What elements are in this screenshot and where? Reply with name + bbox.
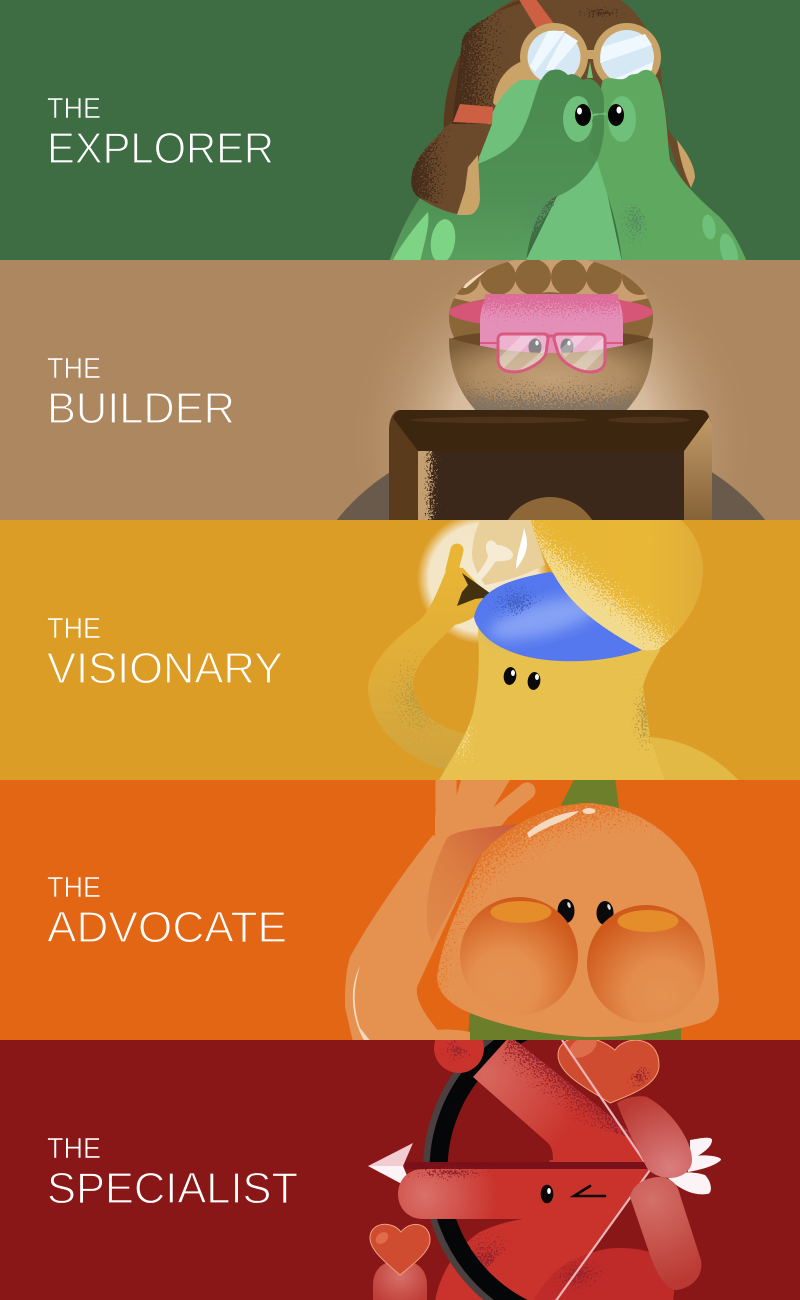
bowl interior: [449, 333, 653, 346]
light bulb with glow: [417, 512, 549, 644]
upper arm: [473, 1036, 650, 1165]
icon: lower heart: [370, 1224, 430, 1275]
left cheek orb: [460, 897, 578, 1015]
shoulder ball: [434, 1023, 484, 1073]
feathers: [668, 1138, 721, 1194]
big yellow head sphere: [530, 515, 703, 651]
heading: the specialist: SPECIALIST: [47, 1164, 298, 1213]
eyes: [504, 667, 540, 690]
panel: the specialist: [0, 1012, 800, 1300]
pink glasses: [480, 332, 623, 374]
pink brim: [449, 300, 653, 324]
bowl body: [449, 338, 653, 412]
lower right body lobe: [532, 1248, 675, 1300]
blue headband: [474, 572, 642, 661]
right upper arm: [617, 1096, 692, 1178]
bowstring: [555, 1040, 650, 1300]
right shoulder: [650, 737, 738, 780]
glow behind box: [384, 306, 719, 474]
illustration: specialist character: [368, 1012, 751, 1300]
right lower arm: [630, 1177, 701, 1290]
heading: the visionary: [48, 618, 281, 683]
heading: the advocate: THE: [47, 872, 101, 904]
panel: the advocate: [0, 772, 800, 1042]
heading: the builder: BUILDER: [47, 384, 235, 433]
neck and torso: [438, 600, 665, 782]
green hat tip: [561, 778, 619, 808]
aviator hat: [443, 0, 695, 200]
heading: the specialist: THE: [47, 1133, 101, 1165]
shoulders: [337, 472, 765, 520]
heading: the advocate: ADVOCATE: [47, 903, 287, 952]
eyes: [528, 338, 574, 353]
heading: the explorer: EXPLORER: [47, 124, 274, 173]
right cheek orb: [587, 905, 705, 1023]
heading: the builder: [48, 358, 232, 423]
lower left arm: [388, 1162, 555, 1219]
illustration: visionary character: [368, 512, 740, 782]
arrow: [368, 1143, 649, 1190]
heading: the advocate: [48, 877, 284, 942]
eye and wink: [541, 1185, 605, 1203]
left hand: [373, 1260, 427, 1300]
heading: the builder: THE: [47, 353, 101, 385]
green body and raised hands: [389, 69, 747, 272]
ear flap: [411, 104, 493, 215]
torso: [435, 1160, 650, 1300]
eyes: [575, 104, 624, 126]
pink head: [480, 294, 623, 356]
eyes: [558, 899, 614, 925]
bow: [435, 1012, 751, 1300]
heading: the explorer: THE: [47, 93, 101, 125]
orange head: [437, 803, 719, 1037]
heading: the visionary: VISIONARY: [47, 644, 283, 693]
panel: the explorer: [0, 0, 800, 272]
heading: the explorer: [48, 98, 271, 163]
raised arm: [368, 550, 494, 770]
green collar: [468, 1012, 681, 1040]
hat with beads: [449, 260, 653, 338]
heading: the specialist: [47, 1133, 298, 1213]
illustration: advocate character: [345, 772, 719, 1042]
icon: goggles: [520, 23, 661, 81]
illustration: explorer character: [389, 0, 747, 272]
arm and hand: [345, 772, 527, 1042]
icon: top heart: [558, 1032, 659, 1103]
panel: the visionary: [0, 512, 800, 782]
open box: [389, 410, 712, 520]
heading: the visionary: THE: [47, 613, 101, 645]
illustration: builder character: [337, 260, 765, 520]
panel: the builder: [0, 260, 800, 520]
